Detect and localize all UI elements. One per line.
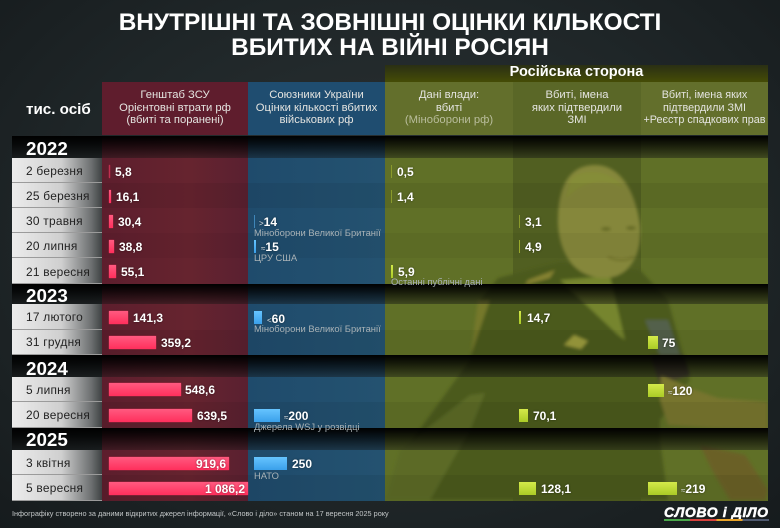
bar: 38,8 (109, 240, 114, 253)
date: 31 December (12, 330, 102, 355)
source: CIA: ЦРУ США (254, 252, 297, 263)
date: 30 May (12, 208, 102, 233)
column header: media and registry: Вбиті, імена яких (662, 89, 747, 101)
footer note: Інфографіку створено за даними відкритих джерел інформації, «Слово і діло» станом на 17 вересня 2025 року (12, 509, 389, 518)
year band 2024 (12, 355, 768, 377)
date: 20 September (12, 402, 102, 428)
bar: 0,5 (391, 165, 392, 178)
column header: General Staff: Орієнтовні втрати рф (119, 102, 231, 114)
value: 4,9: 4,9 (525, 240, 542, 254)
bar: ≈219 (648, 482, 677, 495)
date: 2 March (12, 158, 102, 183)
value: 3,1: 3,1 (525, 215, 542, 229)
column header: allies: Оцінки кількості вбитих (256, 102, 377, 114)
bar: 30,4 (109, 215, 113, 228)
bar: 128,1 (519, 482, 536, 495)
value: 548,6: 548,6 (185, 383, 215, 397)
date: 30 May: 30 травня (26, 214, 83, 228)
bar: 359,2 (109, 336, 156, 349)
year band 2022 (12, 136, 768, 158)
date: 17 February: 17 лютого (26, 310, 83, 324)
date: 3 April (12, 450, 102, 475)
column header: General Staff (102, 82, 248, 135)
value: 75: 75 (662, 336, 675, 350)
column header: allies: військових рф (279, 114, 354, 126)
bar: 75 (648, 336, 658, 349)
column header: media: яких підтвердили (532, 102, 622, 114)
bar: 639,5 (109, 409, 192, 422)
source: WSJ: Джерела WSJ у розвідці (254, 421, 360, 432)
source: UK MoD: Міноборони Великої Британії (254, 227, 381, 238)
bar: 1,4 (391, 190, 392, 203)
row shading (102, 475, 768, 501)
title (119, 9, 661, 61)
bar: 250 (254, 457, 287, 470)
value: ≈15: ≈15 (261, 240, 279, 254)
bar: 4,9 (519, 240, 520, 253)
bar: ≈200 (254, 409, 280, 422)
value: 5,8: 5,8 (115, 165, 132, 179)
date: 17 February (12, 304, 102, 330)
value: 359,2: 359,2 (161, 336, 191, 350)
bar: 548,6 (109, 383, 181, 396)
value: 919,6: 919,6 (196, 457, 226, 471)
date: 25 March (12, 183, 102, 208)
value: ≈219: ≈219 (681, 482, 705, 496)
bar: 1 086,2 (109, 482, 248, 495)
row shading (102, 183, 768, 208)
column header: russian authorities (385, 82, 513, 135)
panel: red column background (102, 136, 248, 501)
title: ВБИТИХ НА ВІЙНІ РОСІЯН (231, 34, 549, 61)
logo text: СЛОВО і ДІЛО (664, 504, 769, 520)
date: 5 July: 5 липня (26, 383, 71, 397)
column header: media and registry: підтвердили ЗМІ (663, 102, 746, 114)
bar: 3,1 (519, 215, 520, 228)
title: ВНУТРІШНІ ТА ЗОВНІШНІ ОЦІНКИ КІЛЬКОСТІ (119, 9, 661, 36)
source: UK MoD: Міноборони Великої Британії (254, 323, 381, 334)
column header: russian authorities: вбиті (436, 102, 462, 114)
column header: General Staff: (вбиті та поранені) (126, 114, 224, 126)
date: 21 September: 21 вересня (26, 265, 90, 279)
value: 639,5: 639,5 (197, 409, 227, 423)
year 2022: 2022 (26, 138, 68, 159)
bar: 55,1 (109, 265, 116, 278)
value: 55,1: 55,1 (121, 265, 144, 279)
value: ≈200: ≈200 (284, 409, 308, 423)
value: >14: >14 (259, 215, 277, 229)
row shading (102, 402, 768, 428)
heading: unit: тис. осіб (26, 101, 91, 118)
value: 141,3: 141,3 (133, 311, 163, 325)
column header: General Staff: Генштаб ЗСУ (140, 89, 210, 101)
date: 21 September (12, 258, 102, 284)
row shading (102, 330, 768, 355)
bar: >14 (254, 215, 255, 228)
value: 128,1: 128,1 (541, 482, 571, 496)
year 2023: 2023 (26, 285, 68, 306)
column header: media and registry: +Реєстр спадкових прав (643, 114, 766, 126)
date: 31 December: 31 грудня (26, 335, 81, 349)
source: last public data: Останні публічні дані (391, 276, 482, 287)
row shading (102, 233, 768, 258)
date: 2 March: 2 березня (26, 164, 83, 178)
date: 5 September: 5 вересня (26, 481, 83, 495)
bar: 14,7 (519, 311, 521, 324)
bar: 141,3 (109, 311, 128, 324)
value: 5,9: 5,9 (398, 265, 415, 279)
value: <60: <60 (267, 312, 285, 326)
bar: ≈120 (648, 384, 664, 397)
value: 1 086,2: 1 086,2 (205, 482, 245, 496)
illustration: olive-tinted photo of an officer (385, 140, 768, 501)
date: 20 July (12, 233, 102, 258)
value: 250: 250 (292, 457, 312, 471)
value: 14,7: 14,7 (527, 311, 550, 325)
year band 2025 (12, 428, 768, 450)
column header: russian authorities: (Міноборони рф) (405, 114, 493, 126)
date: 25 March: 25 березня (26, 189, 90, 203)
date: 3 April: 3 квітня (26, 456, 71, 470)
date: 5 July (12, 377, 102, 402)
source: NATO: НАТО (254, 470, 279, 481)
bar: 919,6 (109, 457, 229, 470)
bar: 16,1 (109, 190, 111, 203)
value: 70,1: 70,1 (533, 409, 556, 423)
bar: ≈15 (254, 240, 256, 253)
column header: media (513, 82, 641, 135)
panel: blue column background (248, 136, 385, 501)
bar: 5,9 (391, 265, 393, 278)
date: 20 September: 20 вересня (26, 408, 90, 422)
year band 2023 (12, 284, 768, 304)
year 2024: 2024 (26, 358, 68, 379)
year 2025: 2025 (26, 429, 68, 450)
column header: media and registry (641, 82, 768, 135)
column header: russian authorities: Дані влади: (419, 89, 479, 101)
bar: 5,8 (109, 165, 110, 178)
value: ≈120: ≈120 (668, 384, 692, 398)
date: 20 July: 20 липня (26, 239, 78, 253)
column header: allies: Союзники України (269, 89, 364, 101)
column header: media: ЗМІ (567, 114, 587, 126)
value: 38,8: 38,8 (119, 240, 142, 254)
column header: allies (248, 82, 385, 135)
logo stripe (664, 519, 769, 521)
value: 16,1: 16,1 (116, 190, 139, 204)
value: 1,4: 1,4 (397, 190, 414, 204)
bar: <60 (254, 311, 262, 324)
heading: russian side (385, 65, 768, 82)
value: 0,5: 0,5 (397, 165, 414, 179)
date: 5 September (12, 475, 102, 501)
value: 30,4: 30,4 (118, 215, 141, 229)
column header: media: Вбиті, імена (545, 89, 609, 101)
heading: russian side: Російська сторона (510, 64, 643, 80)
bar: 70,1 (519, 409, 528, 422)
